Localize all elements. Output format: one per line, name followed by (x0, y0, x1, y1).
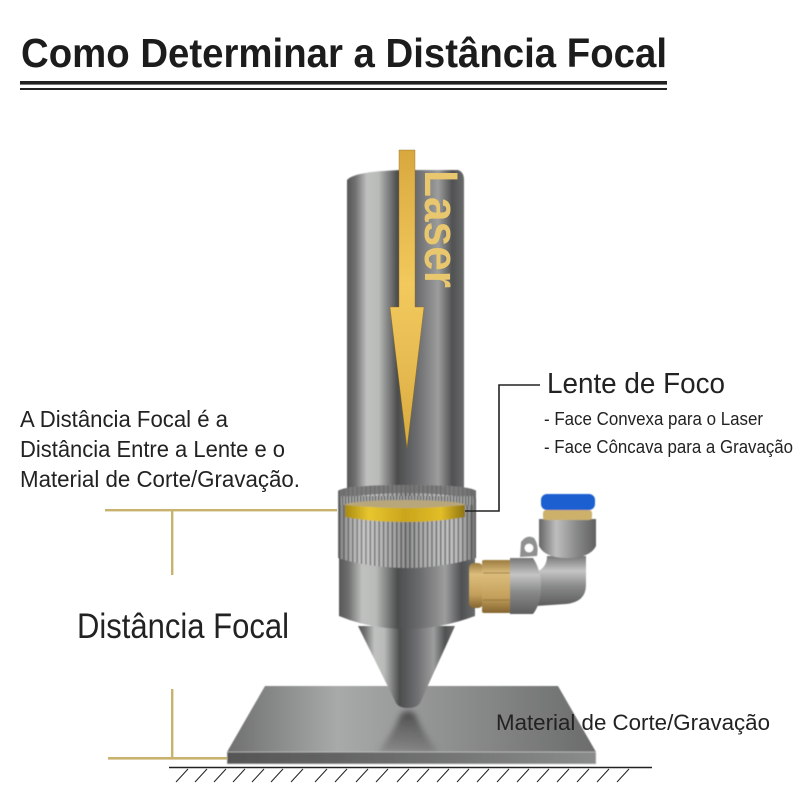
blue cap (541, 494, 595, 510)
title: Como Determinar a Distância Focal (21, 30, 667, 76)
brass thread (469, 563, 483, 608)
cone tip (358, 626, 455, 708)
brass ring (543, 510, 592, 520)
plate top surface (227, 686, 596, 752)
lens tube (347, 170, 464, 490)
air fitting (469, 494, 596, 614)
material label: Material de Corte/Gravação (496, 710, 770, 735)
gold lens ring (345, 500, 465, 522)
eyelet (520, 537, 538, 557)
elbow collar (510, 558, 541, 614)
laser beam arrow (390, 150, 424, 448)
nozzle assembly (338, 170, 476, 708)
plate front edge (227, 752, 596, 764)
lens notes (544, 409, 793, 457)
knurled collar (338, 485, 476, 568)
focal distance label: Distância Focal (77, 607, 289, 646)
illustration: material plate (227, 686, 596, 764)
brass hex nut (482, 560, 512, 613)
focal distance bracket: upper (105, 509, 337, 575)
heading: lens: Lente de Foco (547, 368, 725, 400)
elbow (536, 556, 586, 606)
focal distance explanation: Material de Corte/Gravação. (20, 466, 300, 492)
eyelet hole (525, 544, 533, 552)
laser label: Laser (415, 170, 468, 288)
focal distance bracket: lower (108, 689, 227, 760)
focal distance explanation: A Distância Focal é a (20, 406, 228, 432)
focal distance explanation (20, 406, 300, 492)
ground line with hatching (169, 768, 652, 782)
upper sleeve (539, 519, 596, 558)
lower body (339, 556, 475, 629)
focal distance explanation: Distância Entre a Lente e o (20, 436, 285, 462)
leader line to lens (465, 385, 540, 511)
nozzle reflection (378, 711, 438, 752)
lens notes: - Face Convexa para o Laser (544, 409, 763, 429)
title double underline (20, 81, 667, 90)
